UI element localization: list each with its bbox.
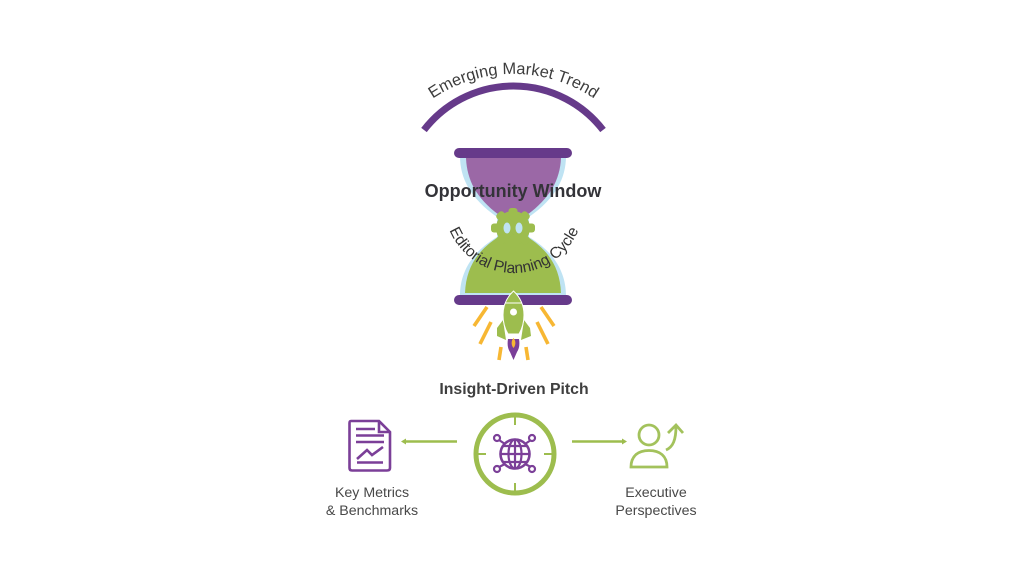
arc: emerging market trend — [421, 62, 606, 132]
rocket fins — [497, 320, 531, 340]
purple sand — [466, 158, 561, 215]
globe — [494, 435, 535, 472]
gear — [491, 208, 535, 248]
icon: globe in target ring — [476, 415, 554, 493]
label: executive perspectives: Executive — [625, 485, 687, 501]
rocket window — [510, 308, 517, 316]
arrow: to executive perspectives — [572, 438, 627, 444]
label: executive perspectives: Perspectives — [615, 503, 697, 519]
rocket body — [503, 291, 524, 334]
flame core — [512, 338, 515, 348]
label: key metrics: & Benchmarks — [326, 503, 418, 519]
rocket nose band — [505, 302, 522, 304]
heading: opportunity window: Opportunity Window — [425, 181, 602, 201]
icon: document with chart — [350, 421, 390, 470]
green sand — [465, 236, 561, 293]
icon: executive with upward arrow — [631, 425, 683, 467]
glass outline — [460, 156, 566, 296]
target ring — [476, 415, 554, 493]
arrow: to key metrics — [401, 438, 457, 444]
icon: rocket — [474, 291, 554, 360]
curved label: editorial planning cycle: Editorial Planning Cycle — [450, 226, 578, 274]
rocket flame — [508, 339, 519, 360]
bottom bar — [454, 295, 572, 305]
top bar — [454, 148, 572, 158]
label: key metrics: Key Metrics — [335, 485, 409, 501]
rocket rays — [474, 307, 554, 360]
arc label: Emerging Market Trend — [428, 62, 600, 98]
heading: insight-driven pitch: Insight-Driven Pitch — [439, 381, 589, 398]
hourglass — [454, 148, 572, 305]
